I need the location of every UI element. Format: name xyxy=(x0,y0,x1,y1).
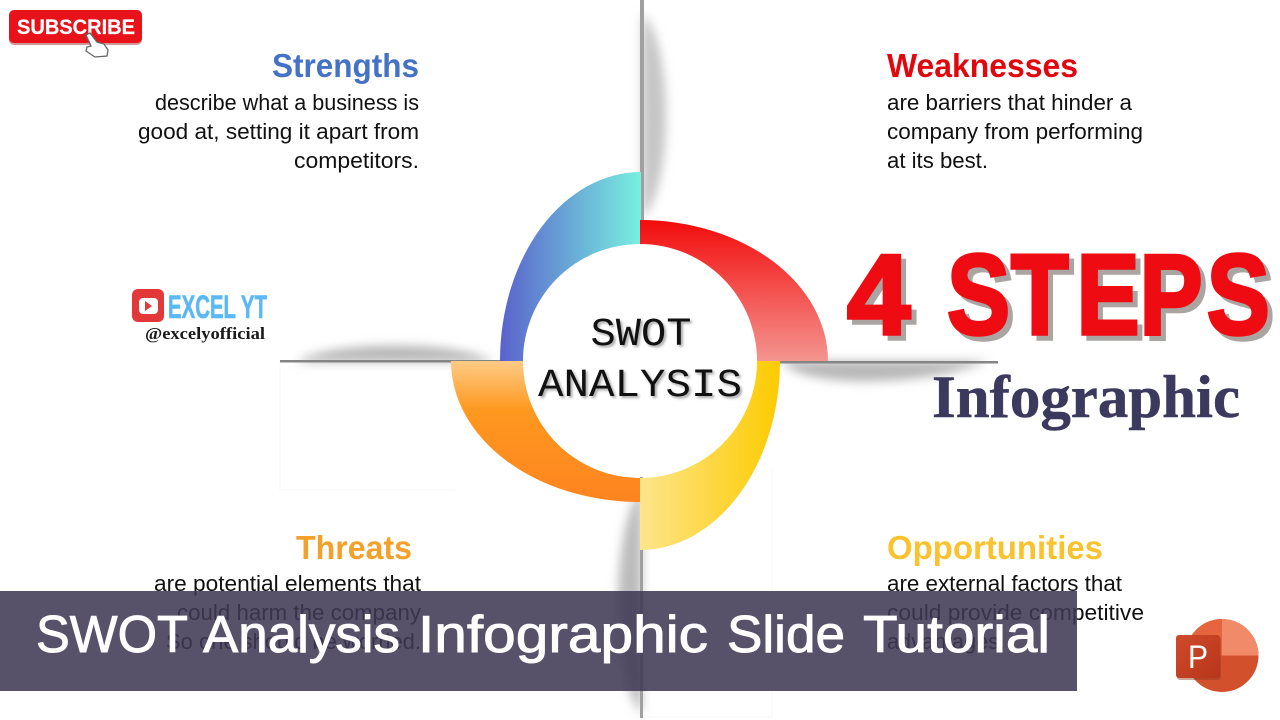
icon: powerpoint logo: P xyxy=(1188,639,1208,675)
text block: weaknesses: company from performing xyxy=(887,119,1143,144)
text block: threats: Threats xyxy=(296,529,412,566)
segment: strengths blue xyxy=(500,172,641,361)
center label: ANALYSIS xyxy=(540,366,744,411)
title banner xyxy=(0,591,1077,691)
text block: weaknesses xyxy=(887,47,1143,173)
text block: strengths: describe what a business is xyxy=(155,90,419,115)
heading face: STEPS xyxy=(947,232,1270,359)
text block: strengths: Strengths xyxy=(272,47,419,84)
title banner: Analysis xyxy=(203,606,400,664)
text block: strengths: good at, setting it apart from xyxy=(138,119,419,144)
segment: threats orange xyxy=(451,361,640,502)
title banner: SWOT xyxy=(36,606,188,664)
segment: weaknesses red xyxy=(640,220,828,361)
heading shadow: STEPS xyxy=(952,237,1275,364)
center label: SWOT xyxy=(590,313,692,358)
heading face: 4 xyxy=(847,232,910,359)
text block: strengths xyxy=(138,47,419,173)
big heading: 4 steps xyxy=(847,232,1275,364)
center label: SWOT xyxy=(592,315,694,360)
text block: opportunities: could provide competitive xyxy=(887,600,1144,625)
icon: video play xyxy=(132,289,164,322)
text block: opportunities xyxy=(887,529,1144,654)
title banner: Slide xyxy=(727,606,845,664)
icon: hand cursor xyxy=(86,33,108,57)
channel logo: EXCEL YT xyxy=(168,289,267,325)
heading shadow: 4 xyxy=(852,237,915,364)
text block: opportunities: Opportunities xyxy=(887,529,1103,566)
text block: weaknesses: are barriers that hinder a xyxy=(887,90,1133,115)
center label: ANALYSIS xyxy=(538,364,742,409)
text block: strengths: competitors. xyxy=(294,148,419,173)
SWOT wheel xyxy=(451,172,828,550)
text block: threats: are potential elements that xyxy=(154,571,421,596)
segment: opportunities yellow xyxy=(640,361,780,550)
channel logo: @excelyofficial xyxy=(145,324,265,343)
icon: powerpoint logo xyxy=(1176,619,1258,692)
text block: threats: So one should be worried. xyxy=(166,629,421,654)
subscribe button: SUBSCRIBE xyxy=(17,16,135,39)
text block: opportunities: advantages. xyxy=(887,629,1005,654)
center label xyxy=(538,313,744,411)
text block: weaknesses: at its best. xyxy=(887,148,988,173)
title banner: Infographic xyxy=(418,606,708,664)
channel logo xyxy=(132,289,267,343)
text block: threats xyxy=(154,529,421,654)
text block: opportunities: are external factors that xyxy=(887,571,1122,596)
subheading: infographic: Infographic xyxy=(932,364,1240,430)
title banner: Tutorial xyxy=(863,606,1050,664)
text block: weaknesses: Weaknesses xyxy=(887,47,1078,84)
subscribe button xyxy=(9,10,142,57)
divider shadows xyxy=(280,0,998,718)
text block: threats: could harm the company xyxy=(177,600,421,625)
